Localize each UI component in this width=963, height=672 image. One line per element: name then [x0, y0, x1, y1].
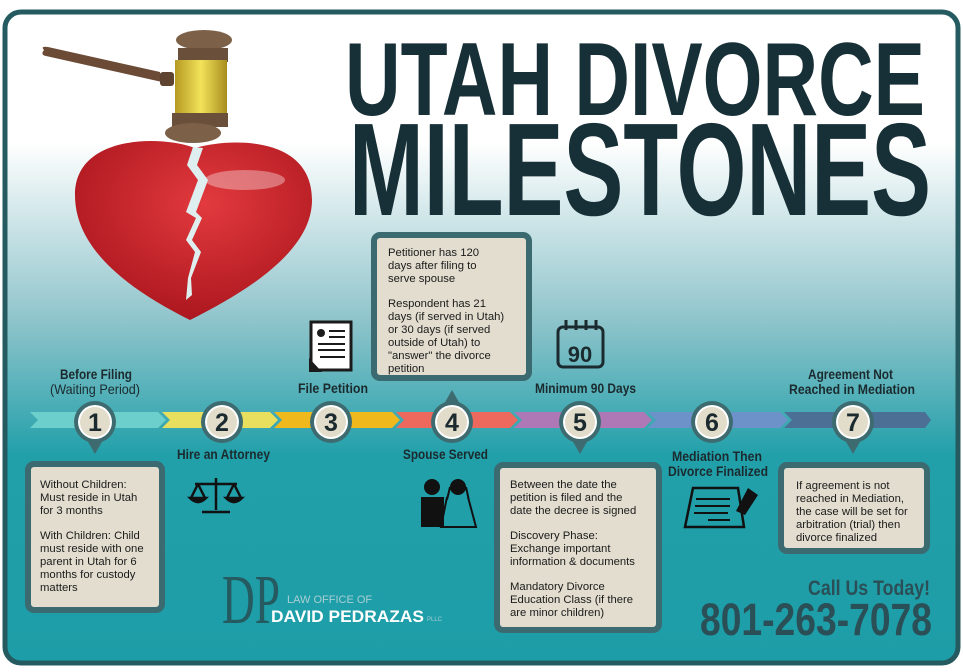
step 7 marker	[832, 401, 874, 454]
box: step 4 details: Petitioner has 120	[388, 247, 479, 259]
box: step 5 details: Mandatory Divorce	[510, 581, 605, 593]
logo: law office of David Pedrazas: DP	[222, 562, 280, 639]
label: mediation then divorce finalized	[668, 448, 768, 479]
title	[345, 22, 931, 243]
box: step 4 details	[374, 235, 529, 378]
step 2 marker: 2	[215, 409, 229, 437]
icon: scales	[190, 478, 242, 512]
label: minimum 90 days: Minimum 90 Days	[535, 380, 636, 396]
box: step 7 details: arbitration (trial) then	[796, 519, 900, 531]
box: step 5 details: Between the date the	[510, 479, 617, 491]
box: step 1 details: must reside with one	[40, 543, 144, 555]
label: before filing	[50, 366, 140, 397]
box: step 4 details: days (if served in Utah)	[388, 311, 504, 323]
label: mediation then divorce finalized: Divorce Finalized	[668, 463, 768, 479]
step 7 marker: 7	[846, 409, 860, 437]
call to action: phone: Call Us Today!	[808, 577, 930, 600]
label: spouse served: Spouse Served	[403, 446, 488, 462]
box: step 4 details: days after filing to	[388, 260, 477, 272]
illustration: gavel and broken heart	[42, 30, 312, 320]
call to action: phone	[700, 577, 932, 645]
label: before filing: Before Filing	[60, 366, 132, 382]
logo: law office of David Pedrazas: PLLC	[427, 617, 443, 623]
box: step 7 details: divorce finalized	[796, 532, 877, 544]
step 4 marker	[431, 390, 473, 443]
box: step 1 details: Must reside in Utah	[40, 492, 137, 504]
step 5 marker	[559, 401, 601, 454]
box: step 1 details: parent in Utah for 6	[40, 556, 137, 568]
box: step 4 details: Respondent has 21	[388, 298, 486, 310]
box: step 1 details: Without Children:	[40, 479, 127, 491]
box: step 1 details: matters	[40, 582, 78, 594]
box: step 4 details: outside of Utah) to	[388, 337, 480, 349]
step 1 marker: 1	[88, 409, 102, 437]
icon: bride and groom	[421, 479, 476, 527]
label: mediation then divorce finalized: Mediation Then	[672, 448, 762, 464]
box: step 1 details: months for custody	[40, 569, 136, 581]
step 6 marker	[691, 401, 733, 443]
box: step 5 details: information & documents	[510, 556, 635, 568]
box: step 5 details: are minor children)	[510, 607, 604, 619]
step 6 marker: 6	[705, 409, 719, 437]
box: step 4 details: or 30 days (if served	[388, 324, 490, 336]
label: file petition: File Petition	[298, 380, 368, 396]
box: step 1 details: for 3 months	[40, 505, 103, 517]
box: step 5 details: date the decree is signed	[510, 505, 636, 517]
step 3 marker: 3	[324, 409, 338, 437]
icon: signing document	[685, 488, 758, 527]
box: step 5 details: petition is filed and the	[510, 492, 622, 504]
box: step 4 details: serve spouse	[388, 273, 455, 285]
label: agreement not reached: Agreement Not	[808, 366, 893, 382]
icon: petition document	[309, 322, 351, 372]
logo: law office of David Pedrazas: DAVID PEDRAZAS	[271, 607, 424, 626]
icon: calendar 90: 90	[568, 342, 592, 367]
step 2 marker	[201, 401, 243, 443]
logo: law office of David Pedrazas: LAW OFFICE OF	[287, 594, 372, 606]
box: step 7 details	[781, 465, 927, 551]
box: step 5 details	[497, 465, 659, 630]
box: step 1 details	[28, 464, 162, 610]
label: agreement not reached: Reached in Mediation	[789, 381, 915, 397]
box: step 7 details: reached in Mediation,	[796, 493, 904, 505]
step 1 marker	[74, 401, 116, 454]
box: step 4 details: "answer" the divorce	[388, 350, 491, 362]
step 4 marker: 4	[445, 409, 459, 437]
label: hire an attorney: Hire an Attorney	[177, 446, 270, 462]
icon: calendar 90	[558, 320, 603, 367]
label: agreement not reached	[789, 366, 915, 397]
label: before filing: (Waiting Period)	[50, 381, 140, 397]
step 3 marker	[310, 401, 352, 443]
box: step 7 details: the case will be set for	[796, 506, 908, 518]
timeline arrow band	[30, 412, 931, 428]
box: step 1 details: With Children: Child	[40, 530, 140, 542]
box: step 4 details: petition	[388, 363, 424, 375]
step 5 marker: 5	[573, 409, 587, 437]
box: step 5 details: Exchange important	[510, 543, 611, 555]
logo: law office of David Pedrazas	[222, 562, 443, 639]
box: step 5 details: Discovery Phase:	[510, 530, 598, 542]
box: step 7 details: If agreement is not	[796, 480, 890, 492]
box: step 5 details: Education Class (if there	[510, 594, 633, 606]
